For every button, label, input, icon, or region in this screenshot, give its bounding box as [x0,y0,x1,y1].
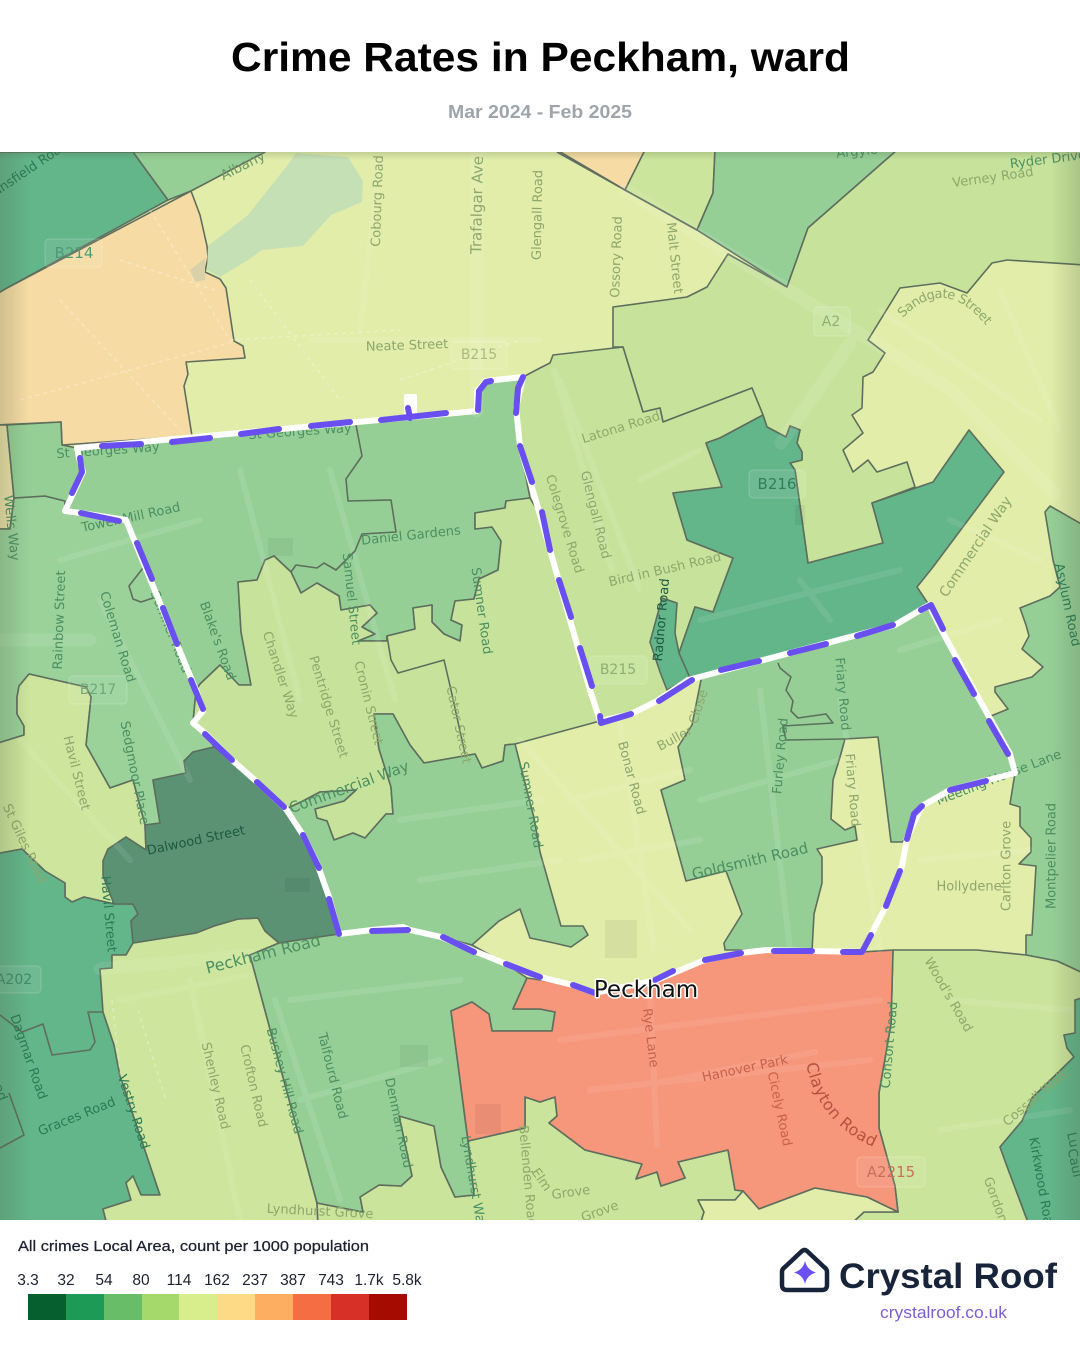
shield B215 south: B215 [600,662,636,678]
area: Radnor teal [650,598,690,690]
street labels: Trafalgar Ave [467,156,487,255]
area: west green beyond ward [0,496,214,825]
legend scale values: 54 [95,1272,113,1289]
area: Wells Way green [7,422,83,511]
street labels: Elm [528,1166,554,1194]
park paths [20,210,520,1100]
street labels: Bonar Road [614,740,648,816]
street labels: Cobourg Road [369,155,387,247]
area: Dalwood darkest green [103,747,339,943]
roads: light street network [0,152,1070,1220]
area: top light green [625,150,715,230]
area: top green wedge [697,150,897,287]
street labels: Graces Road [36,1095,118,1139]
street labels: Verney Road [952,165,1034,191]
street labels: Tower Mill Road [79,500,182,536]
street labels: Wells Way [0,494,22,562]
street labels: Meeting House Lane [934,747,1064,809]
icon: house with star [782,1250,827,1290]
legend scale values [17,1272,422,1289]
street labels: Pentridge Street [305,654,351,760]
area: top orange wedge [557,150,645,190]
street labels: St Giles Road [0,802,49,886]
area: south light patch [698,1188,898,1225]
street labels: Malt Street [663,222,685,294]
street labels: Cossall Walk [1000,1066,1072,1130]
street labels: Rainbow Street [51,570,69,670]
shield B215 north: B215 [461,347,497,363]
logo: Crystal Roof [782,1250,1057,1322]
area: Shenley yellow green [100,918,318,1225]
street labels: Ossory Road [608,216,626,298]
title: Crime Rates in Peckham, ward [231,34,850,80]
Peckham ward boundary: purple dashes [72,377,1008,993]
subtitle: date range: Mar 2024 - Feb 2025 [448,102,632,122]
inner boundary lines [0,425,845,1148]
road shields [0,239,925,1187]
area: park orange [0,191,245,445]
street labels: Lyndhurst Grove [266,1202,374,1222]
street labels: St Georges Way [248,421,352,443]
legend colour bar [28,1294,407,1320]
street labels: Talfourd Road [314,1030,350,1121]
legend scale values: 162 [204,1272,230,1289]
street labels: Sumner Road [515,761,545,849]
street labels: Colegrove Road [542,473,586,575]
street labels: Cicely Road [764,1070,794,1148]
street labels: Sedgmoor Place [117,720,151,826]
shield B214: B214 [55,244,93,262]
street labels: Hanover Park [701,1053,790,1085]
street labels: Argyle [836,142,878,162]
area: north-west teal [0,152,168,295]
street labels: Sumner Road [467,567,495,655]
area: south yellow green [317,1097,743,1225]
street labels: Goldsmith Road [690,839,810,883]
ward boundary stub [404,394,417,416]
street labels: Kirkwood Road [1025,1136,1057,1234]
legend scale values: 743 [318,1272,344,1289]
street labels: St Georges Way [56,440,160,462]
map base area [67,152,1080,990]
website url: crystalroof.co.uk [880,1304,1008,1322]
street labels: Sandgate Street [898,288,992,326]
area: Havil Street yellow green [0,674,146,904]
legend scale values: 114 [167,1272,192,1289]
area: Colegrove yellow green [516,347,763,721]
street labels: Wood's Road [921,955,975,1035]
shield B215 north [451,341,507,369]
street labels: Gordon [980,1175,1010,1225]
street labels: Grove [551,1183,591,1203]
area: Talfourd green [250,927,555,1212]
area: Summer Road ward green [286,714,588,947]
street labels: Peckham Road [204,931,322,977]
street labels: Clayton Road [807,1063,878,1146]
street labels: Bushey Hill Road [263,1026,305,1136]
street labels: Chandler Way [259,630,301,721]
street labels: Lyndhurst Way [457,1135,489,1232]
shield A2 [814,307,850,336]
legend scale values: 3.3 [17,1272,39,1289]
shield A2: A2 [822,314,840,330]
area: east Wood's Road yellow green [850,950,1080,1225]
street labels: Albany [218,148,268,184]
street labels: Sumner Road [147,589,193,675]
street labels: Neate Street [366,337,448,355]
shield A202 [0,966,41,993]
street labels: Shenley Road [198,1041,232,1131]
area: north band green [133,152,265,200]
street labels: Glengall Road [577,469,613,561]
street labels: Buller [655,723,696,754]
legend scale values: 5.8k [392,1272,422,1289]
shield A2215 [857,1157,925,1187]
shield B215 south [590,656,647,684]
street labels: Cronin Street [350,660,386,746]
street labels: Vestry Road [114,1073,152,1151]
area: south-east teal [1000,997,1080,1225]
street labels: Daniel Gardens [360,523,462,549]
street labels: Rye Lane [639,1008,661,1068]
street labels: Furley Road [770,717,792,795]
area: Peckham salmon high crime [451,950,898,1212]
street labels: Hollydene [936,880,1002,894]
street labels: Bird in Bush Road [607,550,723,590]
street labels: Friary Road [841,753,863,827]
area: west teal [0,849,160,1225]
street labels: Latona Road [580,409,662,447]
street labels: Carlton Grove [1000,821,1014,911]
place label: Peckham: Peckham [594,977,698,1003]
lake [207,153,363,277]
shield B216 [749,470,805,498]
street labels: Bellenden Road [515,1125,539,1227]
area: north-west ward green [65,377,530,690]
area: north-east yellow green [613,150,1080,563]
street labels: Friary Road [831,657,853,731]
shield B217 [69,676,127,704]
street labels: Dagmar Road [6,1012,50,1102]
street labels: Blake's Road [196,600,238,682]
area: east ward green [661,605,1015,951]
street labels: Commercial Way [287,757,412,817]
street labels: Consort Road [879,1001,901,1089]
street labels: Montpelier Road [1044,803,1060,909]
street labels: Havil Street [97,875,119,953]
legend [17,1238,422,1320]
legend scale values: 32 [57,1272,75,1289]
legend scale values: 80 [132,1272,150,1289]
area: Wells Way strip [0,425,14,529]
line: top boundary [557,152,697,230]
legend title: All crimes Local Area, count per 1000 population [18,1238,369,1255]
street labels: Crofton Road [236,1043,270,1129]
street labels: Denman Road [381,1077,415,1169]
area: central yellow green [193,498,600,840]
street labels: Cator Street [442,685,474,765]
street labels: Commercial Way [936,494,1016,600]
building patches [268,505,805,1134]
area: Commercial Way right green [991,506,1080,974]
shield A2215: A2215 [867,1163,915,1181]
grey patch [190,258,205,282]
Peckham ward boundary: white line [65,377,1015,993]
street labels: Havil Street [59,734,93,812]
street labels: Dalwood Street [146,823,246,859]
street labels: Close [686,688,712,726]
shield B216: B216 [758,475,796,493]
street labels: Samuel Street [339,552,363,646]
street labels: Radnor Road [651,578,673,662]
shield B214 [45,239,102,267]
map vignette [0,152,1080,1220]
shield B217: B217 [80,682,116,698]
area: B216 teal [673,415,1004,682]
street labels: Coleman Road [96,590,138,684]
wordmark: Crystal Roof [839,1257,1057,1296]
street labels: Grove [579,1198,621,1226]
street labels: Glengall Road [530,170,546,260]
legend scale values: 237 [242,1272,268,1289]
legend scale values: 387 [280,1272,306,1289]
legend scale values: 1.7k [354,1272,384,1289]
